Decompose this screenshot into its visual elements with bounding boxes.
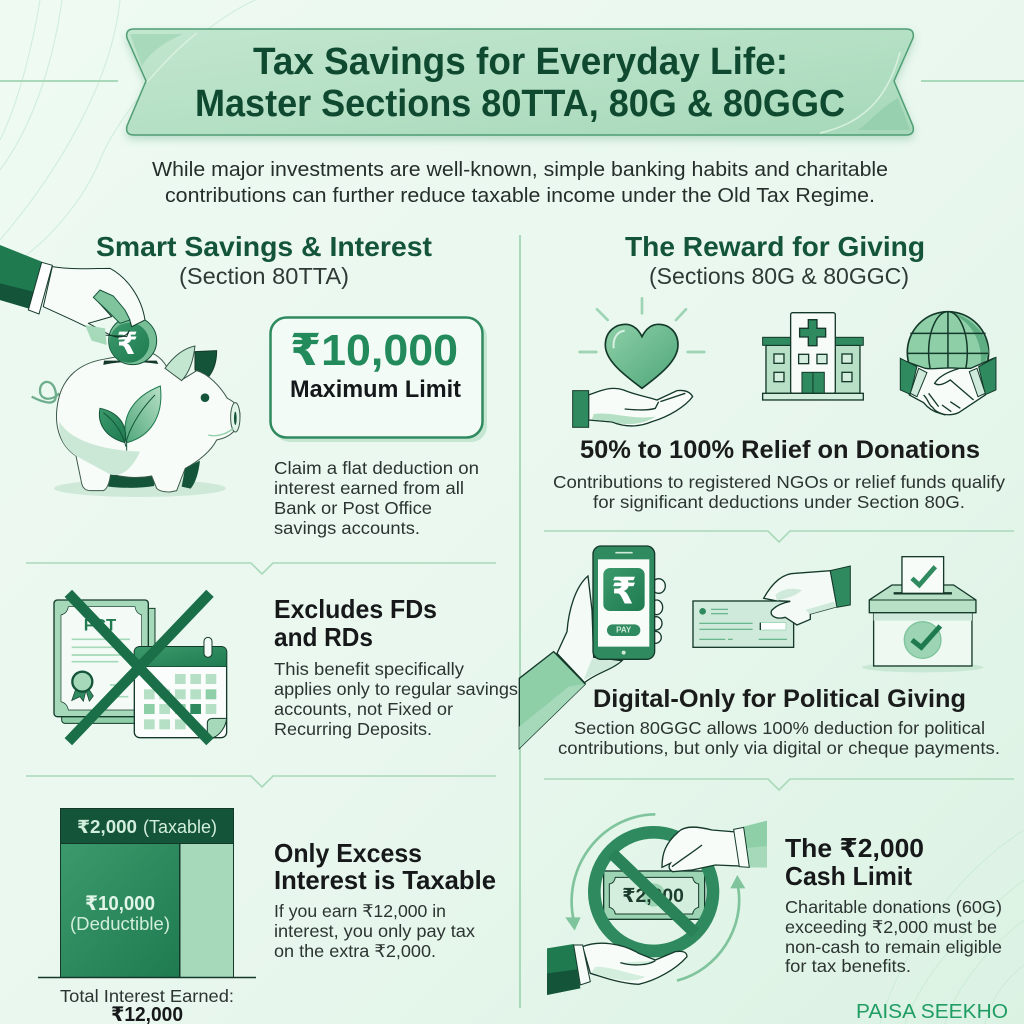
brand logo text: PAISA SEEKHO — [856, 1001, 1008, 1023]
text: donation description: for significant deductions under Section 80G. — [593, 492, 965, 512]
text: exclusion description: Recurring Deposits. — [274, 719, 432, 739]
panel: excludes FDs and RDs — [54, 593, 518, 742]
bar chart: interest split — [38, 808, 256, 1024]
panel: cash limit — [547, 814, 1002, 995]
heading: reward for giving: The Reward for Giving — [625, 231, 925, 262]
panel: only excess interest is taxable — [38, 808, 496, 1024]
text: donation description: Contributions to registered NGOs or relief funds qualify — [553, 472, 1005, 492]
text: exclusion description: accounts, not Fixed or — [274, 699, 453, 719]
icon: hand holding phone with payment app: PAY — [616, 626, 632, 635]
text: flat deduction description: interest earned from all — [274, 478, 464, 498]
text: cash limit description: for tax benefits. — [785, 956, 911, 976]
icon: hand holding phone with payment app: ₹ — [611, 570, 637, 611]
callout: 10,000 maximum limit — [270, 318, 487, 442]
heading: digital only: Digital-Only for Political Giving — [593, 685, 966, 713]
icon: no cash between hands: ₹2,000 — [622, 886, 684, 907]
icon: heart over open hand — [573, 298, 704, 427]
bar chart: interest split: (Taxable) — [143, 817, 217, 837]
heading: smart savings: Smart Savings & Interest — [96, 231, 432, 262]
icon: crossed certificate and calendar: FCT — [84, 616, 116, 635]
heading: excludes FDs and RDs: Excludes FDs — [274, 594, 437, 624]
text: flat deduction description: Claim a flat deduction on — [274, 458, 479, 478]
heading: excludes FDs and RDs: and RDs — [274, 622, 373, 652]
heading: the 2,000 cash limit: Cash Limit — [785, 861, 912, 891]
heading: only excess interest: Only Excess — [274, 838, 422, 868]
panel: reward for giving — [553, 231, 1005, 512]
column divider — [519, 235, 521, 1008]
bar chart: interest split: ₹10,000 — [85, 893, 155, 915]
panel: digital only for political giving — [519, 546, 1000, 758]
panel: smart savings and interest — [0, 231, 487, 538]
callout: 10,000 maximum limit: Maximum Limit — [290, 376, 461, 403]
subheading: section 80TTA: (Section 80TTA) — [179, 263, 349, 289]
text: exclusion description: This benefit specifically — [274, 659, 464, 679]
intro text: contributions can further reduce taxable income under the Old Tax Regime. — [165, 185, 875, 207]
icon: hand passing cheque — [693, 566, 850, 647]
text: exclusion description: applies only to regular savings — [274, 679, 518, 699]
bar chart: interest split: Total Interest Earned: — [60, 986, 234, 1006]
text: excess description: If you earn ₹12,000 in — [274, 901, 446, 921]
heading: only excess interest: Interest is Taxable — [274, 865, 496, 895]
bar chart: interest split: ₹2,000 — [77, 817, 137, 837]
text: cash limit description: Charitable donations (60G) — [785, 897, 1002, 917]
icon: hand holding phone with payment app — [519, 546, 665, 748]
bar chart: interest split: (Deductible) — [70, 914, 170, 934]
icon: globe and handshake — [900, 312, 996, 415]
icon: hospital — [763, 313, 863, 400]
icon: hand dropping coin in piggy bank: ₹ — [117, 327, 138, 361]
icon: hand dropping coin in piggy bank — [0, 245, 240, 497]
heading: the 2,000 cash limit: The ₹2,000 — [785, 833, 924, 863]
callout: 10,000 maximum limit: ₹10,000 — [290, 326, 458, 375]
subheading: sections 80G and 80GGC: (Sections 80G & 80GGC) — [649, 263, 909, 289]
text: excess description: interest, you only pay tax — [274, 921, 475, 941]
heading: relief on donations: 50% to 100% Relief on Donations — [580, 436, 980, 464]
icon: ballot box — [862, 557, 983, 672]
text: excess description: on the extra ₹2,000. — [274, 941, 436, 961]
text: cash limit description: non-cash to remain eligible — [785, 937, 1002, 957]
title banner — [127, 29, 913, 135]
text: flat deduction description: savings accounts. — [274, 518, 420, 538]
icon: crossed certificate and calendar — [54, 593, 227, 742]
text: flat deduction description: Bank or Post Office — [274, 498, 432, 518]
title text: Tax Savings for Everyday Life: — [253, 41, 788, 83]
text: 80GGC description: contributions, but only via digital or cheque payments. — [558, 738, 1000, 758]
title text: Master Sections 80TTA, 80G & 80GGC — [195, 83, 845, 125]
text: 80GGC description: Section 80GGC allows 100% deduction for political — [574, 718, 985, 738]
text: cash limit description: exceeding ₹2,000 must be — [785, 917, 997, 937]
intro text: While major investments are well-known, simple banking habits and charitable — [152, 159, 888, 181]
icon: no cash between hands — [547, 814, 767, 995]
